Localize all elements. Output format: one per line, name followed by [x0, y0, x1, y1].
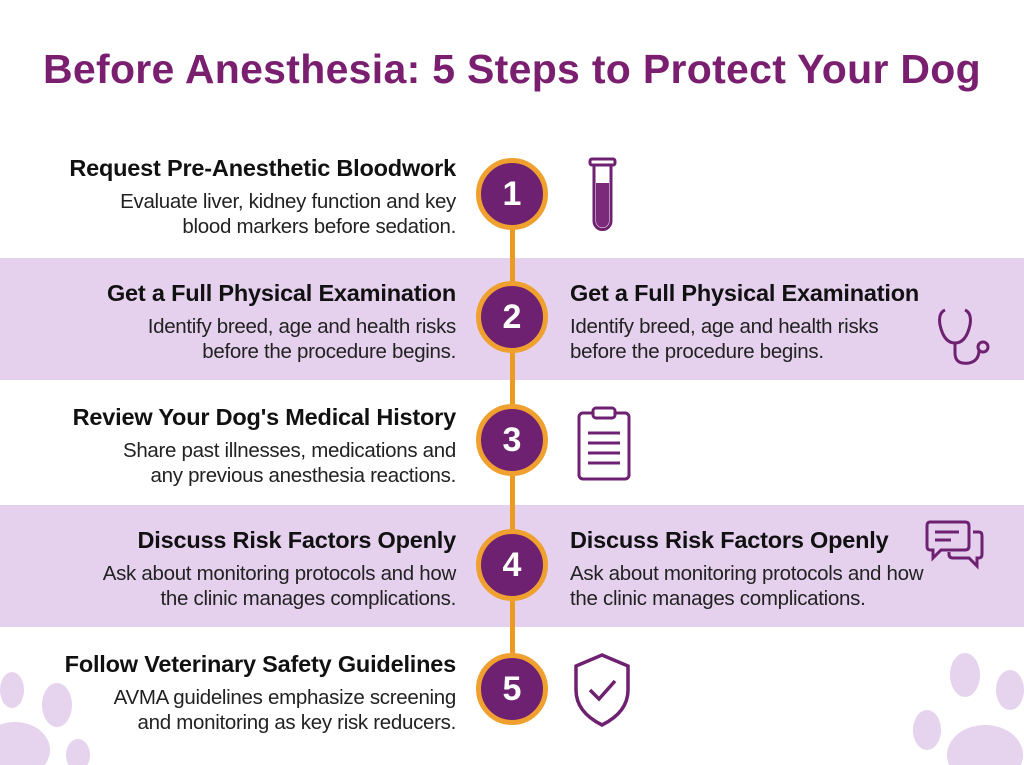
step 5 number: 5 — [503, 670, 521, 708]
icon: chat bubbles — [926, 520, 984, 570]
step 1 number: 1 — [503, 175, 521, 213]
step 5 text: Follow Veterinary Safety Guidelines — [65, 651, 456, 677]
step 4 number — [476, 529, 548, 601]
step 1 text — [69, 155, 456, 238]
step 2 number — [476, 281, 548, 353]
band: step 2 — [0, 258, 1024, 380]
step 2 text right: Identify breed, age and health risks — [570, 315, 878, 338]
step 4 text left — [102, 527, 456, 610]
step 2 text left — [107, 280, 456, 363]
step 3 text — [73, 404, 456, 487]
step 5 number — [476, 653, 548, 725]
step 2 text left: before the procedure begins. — [202, 340, 456, 363]
step 3 number: 3 — [503, 421, 521, 459]
step 4 text left: Ask about monitoring protocols and how — [103, 562, 456, 585]
step 1 text: Evaluate liver, kidney function and key — [120, 190, 456, 213]
step 4 text right — [570, 527, 924, 610]
step 3 text: Review Your Dog's Medical History — [73, 404, 456, 430]
step 5 text: and monitoring as key risk reducers. — [138, 711, 456, 734]
paw: bottom left — [0, 672, 90, 765]
timeline line — [510, 195, 515, 690]
step 3 number — [476, 404, 548, 476]
step 1 number — [476, 158, 548, 230]
step 4 text left: Discuss Risk Factors Openly — [137, 527, 456, 553]
step 5 text — [65, 651, 456, 734]
icon: test tube — [588, 158, 616, 231]
icon: clipboard — [578, 406, 630, 480]
band: step 4 — [0, 505, 1024, 627]
step 3 text: Share past illnesses, medications and — [123, 439, 456, 462]
step 4 text right: Ask about monitoring protocols and how — [570, 562, 923, 585]
step 2 text right: Get a Full Physical Examination — [570, 280, 919, 306]
step 4 text left: the clinic manages complications. — [161, 587, 456, 610]
step 2 text left: Get a Full Physical Examination — [107, 280, 456, 306]
title: Before Anesthesia: 5 Steps to Protect Your Dog — [43, 46, 981, 92]
step 1 text: blood markers before sedation. — [182, 215, 456, 238]
step 2 text left: Identify breed, age and health risks — [148, 315, 456, 338]
step 4 text right: the clinic manages complications. — [570, 587, 865, 610]
step 5 text: AVMA guidelines emphasize screening — [114, 686, 456, 709]
step 2 text right: before the procedure begins. — [570, 340, 824, 363]
paw: bottom right — [913, 653, 1024, 765]
step 1 text: Request Pre-Anesthetic Bloodwork — [69, 155, 456, 181]
icon: shield check — [574, 653, 630, 727]
step 2 number: 2 — [503, 298, 521, 336]
step 4 number: 4 — [503, 546, 521, 584]
step 3 text: any previous anesthesia reactions. — [151, 464, 456, 487]
step 4 text right: Discuss Risk Factors Openly — [570, 527, 889, 553]
icon: stethoscope — [938, 308, 990, 365]
step 2 text right — [570, 280, 919, 363]
